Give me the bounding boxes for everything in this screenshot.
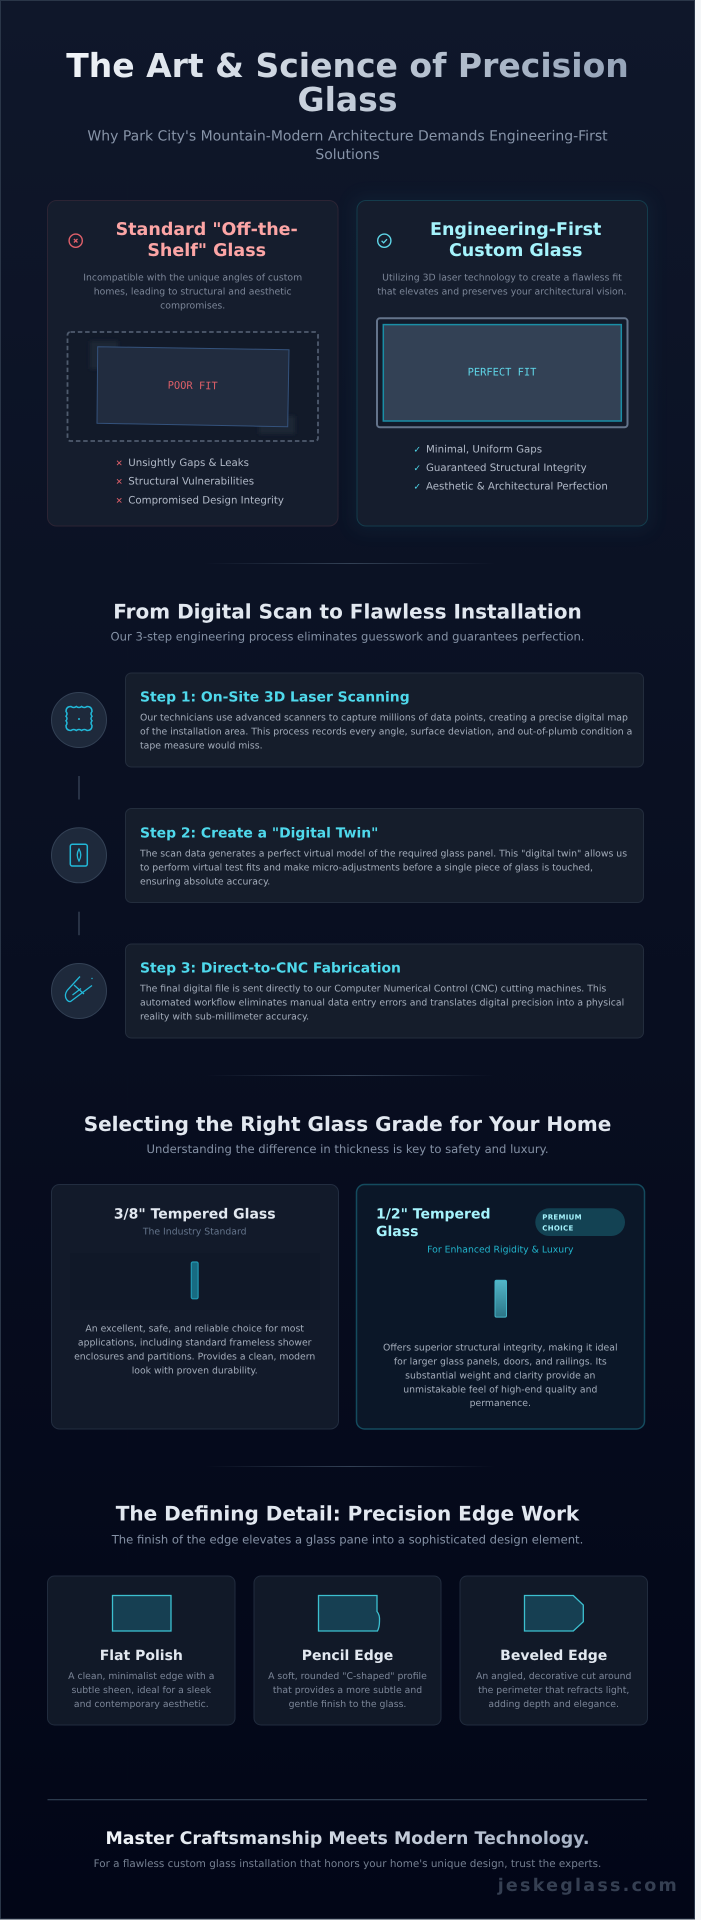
description: beveled edge: An angled, decorative cut around — [476, 1671, 632, 1682]
description: 3/8 inch glass: enclosures and partitions. Provides a clean, modern — [74, 1352, 315, 1363]
description: flat polish — [68, 1671, 214, 1710]
list: benefits: ✓ — [414, 445, 421, 455]
description: 1/2 inch glass: substantial weight and clarity provide an — [405, 1370, 596, 1381]
icon: thick glass bar — [495, 1280, 506, 1317]
icon: check circle — [378, 234, 391, 247]
description: flat polish: subtle sheen, ideal for a sleek — [71, 1685, 212, 1696]
panel: engineered glass — [352, 196, 652, 532]
card: step 2: to perform virtual test fits and make micro-adjustments before a single piece of glass is touched, — [140, 862, 593, 873]
description: pencil edge: that provides a more subtle and — [273, 1685, 422, 1696]
icon: pencil edge — [318, 1596, 380, 1631]
description: pencil edge — [268, 1671, 427, 1710]
list: benefits: ✓ — [414, 482, 421, 492]
card: step 3 — [126, 944, 644, 1038]
panel: 1/2 inch glass — [356, 1184, 644, 1429]
description: pencil edge: gentle finish to the glass. — [289, 1699, 406, 1710]
card: step 2: ensuring absolute accuracy. — [140, 876, 270, 887]
list: drawbacks: Unsightly Gaps & Leaks — [128, 458, 249, 469]
description: 3/8 inch glass: look with proven durability. — [132, 1366, 258, 1377]
list: benefits: ✓ — [414, 464, 421, 474]
panel: flat polish: Flat Polish — [100, 1648, 183, 1664]
description: standard glass: homes, leading to structural and aesthetic — [94, 287, 292, 298]
description: 1/2 inch glass: Offers superior structural integrity, making it ideal — [383, 1342, 618, 1353]
description: beveled edge: the perimeter that refracts light, — [478, 1685, 629, 1696]
card: step 3: Step 3: Direct-to-CNC Fabrication — [140, 961, 401, 977]
title — [66, 46, 629, 119]
heading: glass grade section: Selecting the Right Glass Grade for Your Home — [84, 1112, 611, 1136]
heading: standard glass — [116, 220, 298, 261]
heading: engineered glass: Custom Glass — [449, 241, 582, 261]
description: standard glass: Incompatible with the unique angles of custom — [83, 273, 302, 284]
description: flat polish: and contemporary aesthetic. — [74, 1699, 209, 1710]
step 3 — [52, 944, 644, 1038]
list: drawbacks: ✕ — [116, 496, 123, 506]
list: drawbacks: ✕ — [116, 459, 123, 469]
panel: beveled edge: Beveled Edge — [500, 1648, 607, 1664]
description: engineered glass — [377, 273, 627, 298]
card: step 1: Step 1: On-Site 3D Laser Scanning — [140, 690, 410, 706]
description: 1/2 inch glass — [383, 1342, 618, 1409]
heading: glass grade section — [84, 1112, 611, 1156]
card: step 1: Our technicians use advanced scanners to capture millions of data points, creating a precise digital map — [140, 713, 628, 724]
list: drawbacks: ✕ — [116, 478, 123, 488]
title: Glass — [298, 80, 397, 119]
badge: premium choice: CHOICE — [542, 1225, 574, 1233]
diagram: perfect fit — [377, 318, 628, 427]
heading: standard glass: Shelf" Glass — [147, 241, 266, 261]
icon: x circle — [69, 234, 82, 247]
panel: flat polish — [48, 1576, 235, 1725]
step 2 — [52, 808, 644, 902]
description: 3/8 inch glass — [74, 1324, 315, 1377]
panel: 3/8 inch glass: 3/8" Tempered Glass — [114, 1206, 276, 1222]
description: standard glass: compromises. — [160, 301, 225, 312]
badge: premium choice — [535, 1208, 625, 1236]
description: beveled edge: adding depth and elegance. — [488, 1699, 619, 1710]
subtitle — [87, 129, 608, 163]
panel: pencil edge — [254, 1576, 441, 1725]
badge: premium choice: PREMIUM — [542, 1213, 582, 1221]
panel: pencil edge: Pencil Edge — [302, 1648, 393, 1664]
card: step 1 — [126, 673, 644, 767]
heading: standard glass: Standard "Off-the- — [116, 220, 298, 240]
description: 3/8 inch glass: An excellent, safe, and reliable choice for most — [85, 1324, 304, 1335]
description: 3/8 inch glass: applications, including standard frameless shower — [78, 1338, 312, 1349]
subtitle: Solutions — [315, 147, 380, 163]
card: step 2: The scan data generates a perfect virtual model of the required glass panel. This "digital twin" allows us — [139, 848, 627, 859]
panel: 1/2 inch glass: Glass — [376, 1224, 418, 1240]
panel: 1/2 inch glass: 1/2" Tempered — [376, 1206, 490, 1222]
card: step 3: automated workflow eliminates manual data entry errors and translates digital precision into a physical — [140, 998, 624, 1009]
description: engineered glass: that elevates and preserves your architectural vision. — [377, 287, 627, 298]
description: beveled edge — [476, 1671, 632, 1710]
diagram: poor fit — [68, 332, 318, 441]
step 1 — [52, 673, 644, 767]
icon: digital twin — [52, 828, 106, 883]
brand url: jeskeglass.com — [497, 1876, 679, 1896]
panel: 3/8 inch glass — [52, 1184, 338, 1429]
subheading: edge section: The finish of the edge elevates a glass pane into a sophisticated design element. — [111, 1532, 583, 1546]
subheading: glass grade section: Understanding the difference in thickness is key to safety and luxury. — [146, 1142, 549, 1156]
footer — [94, 1829, 679, 1896]
description: engineered glass: Utilizing 3D laser technology to create a flawless fit — [382, 273, 622, 284]
list: drawbacks — [116, 458, 284, 506]
heading: engineered glass — [430, 220, 601, 261]
list: drawbacks: Compromised Design Integrity — [128, 495, 284, 506]
icon: cnc cutter — [52, 964, 106, 1018]
description: 1/2 inch glass: permanence. — [470, 1398, 531, 1409]
card: step 3: reality with sub-millimeter accuracy. — [140, 1012, 309, 1023]
panel: 3/8 inch glass: The Industry Standard — [142, 1227, 247, 1238]
diagram: perfect fit: PERFECT FIT — [468, 366, 537, 378]
heading: process section: From Digital Scan to Flawless Installation — [113, 599, 582, 623]
description: pencil edge: A soft, rounded "C-shaped" profile — [268, 1671, 427, 1682]
card: step 1: tape measure would miss. — [140, 740, 263, 751]
card: step 2: Step 2: Create a "Digital Twin" — [140, 825, 378, 841]
list: drawbacks: Structural Vulnerabilities — [128, 477, 254, 488]
icon: thin glass bar — [191, 1262, 198, 1299]
icon: laser scan — [52, 692, 106, 748]
description: 1/2 inch glass: unmistakable feel of high-end quality and — [403, 1384, 597, 1395]
heading: edge section: The Defining Detail: Precision Edge Work — [116, 1502, 580, 1526]
list: benefits: Aesthetic & Architectural Perfection — [426, 481, 608, 492]
title: The Art & Science of Precision — [66, 46, 629, 85]
icon: beveled edge — [524, 1596, 583, 1631]
card: step 3: The final digital file is sent directly to our Computer Numerical Control (CNC) cutting machines. This — [139, 984, 606, 995]
panel: 1/2 inch glass: For Enhanced Rigidity & Luxury — [427, 1245, 574, 1256]
panel: beveled edge — [460, 1576, 648, 1725]
description: flat polish: A clean, minimalist edge with a — [68, 1671, 214, 1682]
heading: edge section — [111, 1502, 583, 1546]
heading: engineered glass: Engineering-First — [430, 220, 601, 240]
heading: process section — [111, 599, 584, 644]
icon: flat edge — [112, 1596, 171, 1631]
diagram: poor fit: POOR FIT — [168, 380, 219, 392]
card: step 1: of the installation area. This process records every angle, surface deviation, and out-of-plumb condition a — [140, 727, 632, 738]
card: step 2 — [126, 808, 644, 902]
panel: standard glass — [48, 200, 338, 526]
description: 1/2 inch glass: for larger glass panels, doors, and railings. Its — [394, 1356, 607, 1367]
footer: For a flawless custom glass installation that honors your home's unique design, trust the experts. — [94, 1858, 601, 1870]
footer: Master Craftsmanship Meets Modern Technology. — [105, 1829, 590, 1849]
list: benefits — [414, 444, 608, 492]
list: benefits: Guaranteed Structural Integrity — [426, 463, 587, 474]
description: standard glass — [83, 273, 302, 312]
subheading: process section: Our 3-step engineering process eliminates guesswork and guarantees perfection. — [111, 630, 584, 644]
subtitle: Why Park City's Mountain-Modern Architecture Demands Engineering-First — [87, 129, 608, 145]
list: benefits: Minimal, Uniform Gaps — [426, 444, 542, 455]
